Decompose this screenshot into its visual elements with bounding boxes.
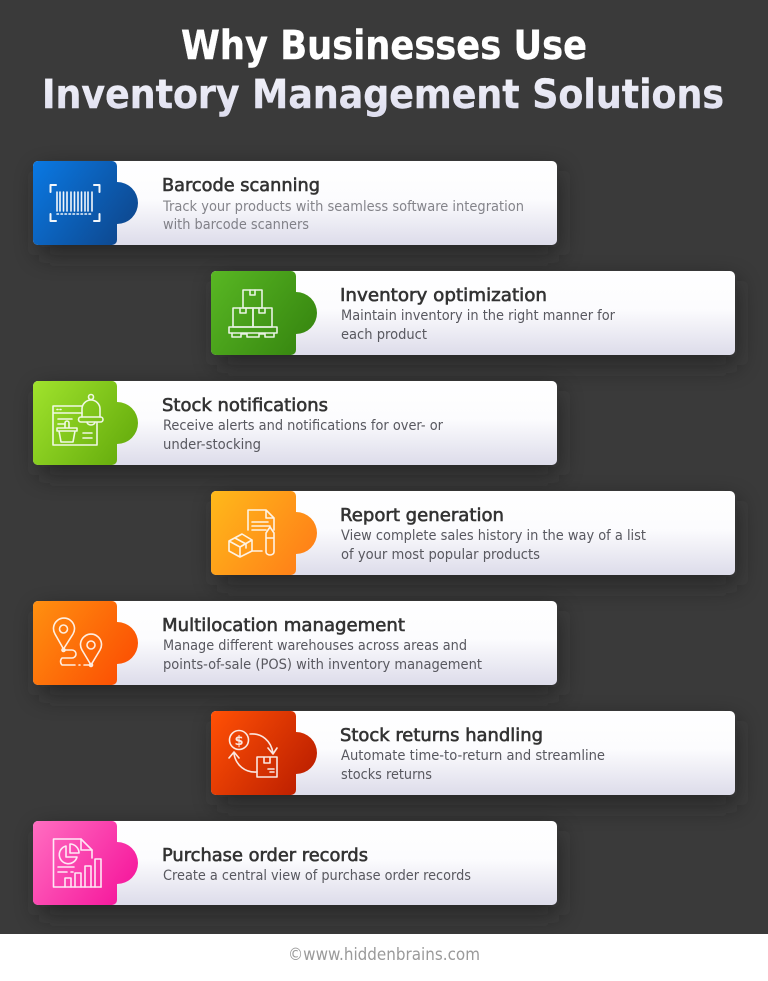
icon: document with pie and bars bbox=[54, 839, 101, 887]
heading: stock returns handling: Stock returns handling bbox=[340, 726, 543, 746]
text: multilocation management description: points-of-sale (POS) with inventory management bbox=[163, 657, 482, 673]
text: multilocation management description bbox=[163, 638, 482, 673]
panel: stock notifications bbox=[33, 381, 559, 475]
text: barcode scanning description bbox=[162, 199, 524, 233]
heading: report generation: Report generation bbox=[340, 506, 504, 526]
panel: report generation bbox=[211, 491, 737, 585]
text: stock returns handling description bbox=[341, 748, 605, 783]
heading: stock notifications: Stock notifications bbox=[162, 396, 328, 416]
heading: purchase order records: Purchase order records bbox=[162, 846, 368, 866]
icon: report, pencil and box bbox=[229, 510, 274, 557]
text: multilocation management description: Manage different warehouses across areas and bbox=[163, 638, 467, 654]
heading: barcode scanning: Barcode scanning bbox=[162, 176, 320, 196]
text: stock notifications description: Receive alerts and notifications for over- or bbox=[163, 418, 443, 434]
text: inventory optimization description bbox=[341, 308, 615, 343]
icon: money and box return cycle bbox=[229, 730, 277, 777]
text: inventory optimization description: each product bbox=[341, 327, 427, 343]
panel: stock returns handling bbox=[211, 711, 737, 805]
panel: inventory optimization bbox=[211, 271, 737, 365]
icon: barcode bbox=[50, 185, 100, 221]
panel: multilocation management bbox=[33, 601, 559, 695]
title bbox=[42, 23, 724, 118]
text: purchase order records description: Create a central view of purchase order records bbox=[163, 868, 471, 884]
text: report generation description: View complete sales history in the way of a list bbox=[341, 528, 646, 544]
footer credit: ©www.hiddenbrains.com bbox=[288, 945, 480, 964]
text: stock notifications description bbox=[163, 418, 443, 453]
panel: purchase order records bbox=[33, 821, 559, 915]
footer band bbox=[0, 934, 768, 981]
panel: barcode scanning bbox=[33, 161, 559, 255]
heading: multilocation management: Multilocation management bbox=[162, 616, 405, 636]
text: stock returns handling description: Automate time-to-return and streamline bbox=[341, 748, 605, 764]
icon: stacked boxes on pallet bbox=[229, 290, 277, 337]
text: inventory optimization description: Maintain inventory in the right manner for bbox=[341, 308, 615, 324]
heading: inventory optimization: Inventory optimization bbox=[340, 286, 547, 306]
text: report generation description: of your most popular products bbox=[341, 547, 540, 563]
text: stock returns handling description: stocks returns bbox=[341, 767, 432, 783]
text: barcode scanning description: Track your products with seamless software integration bbox=[162, 199, 524, 215]
icon: bell and basket window bbox=[53, 394, 103, 445]
text: barcode scanning description: with barcode scanners bbox=[163, 217, 309, 233]
icon: location pins with route bbox=[54, 618, 102, 666]
icon: money and box return cycle: $ bbox=[234, 734, 244, 749]
title: Why Businesses Use bbox=[181, 23, 587, 69]
text: stock notifications description: under-stocking bbox=[163, 437, 261, 453]
text: report generation description bbox=[341, 528, 646, 563]
